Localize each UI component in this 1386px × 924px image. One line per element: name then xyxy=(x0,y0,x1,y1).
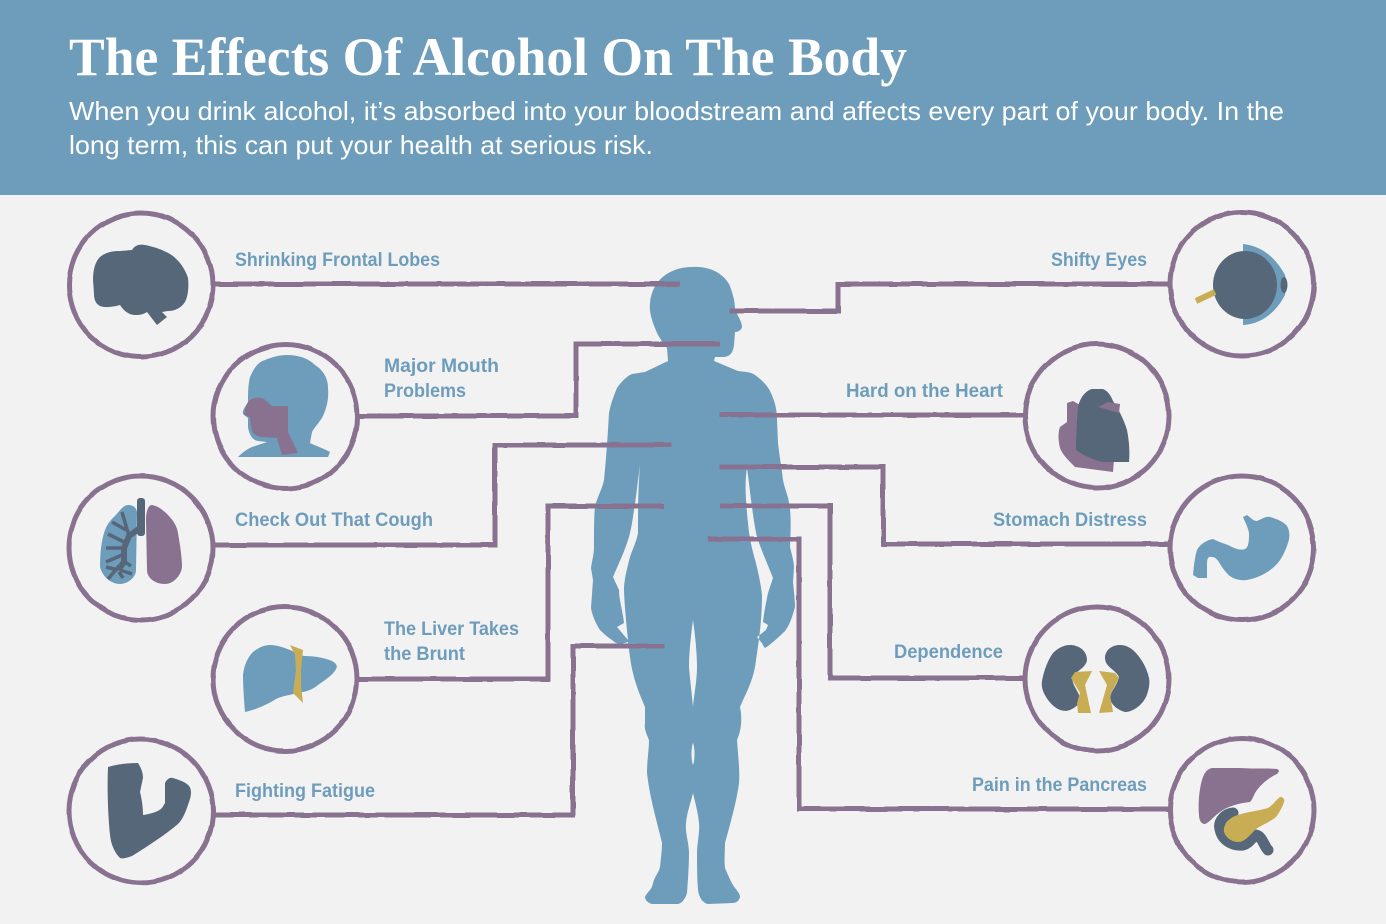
icon: pancreas xyxy=(1199,768,1284,850)
header banner xyxy=(0,0,1386,195)
label: Shifty Eyes: Shifty Eyes xyxy=(1051,250,1147,271)
icon: stomach xyxy=(1193,515,1289,580)
label: Check Out That Cough: Check Out That Cough xyxy=(235,510,433,531)
badge: stomach xyxy=(1170,476,1314,620)
connector: cough xyxy=(214,445,672,545)
icon: flexed arm xyxy=(108,763,191,858)
icon: brain xyxy=(93,245,188,325)
icon: kidneys xyxy=(1042,645,1149,713)
connector: fatigue xyxy=(214,646,664,815)
connector: heart xyxy=(720,412,1024,418)
connector: dependence xyxy=(720,506,1024,678)
badge: heart xyxy=(1025,344,1169,488)
label: The Liver Takes the Brunt: The Liver Takes xyxy=(384,619,519,640)
connector: stomach xyxy=(720,467,1168,544)
badge: liver xyxy=(213,607,357,751)
subtitle: long term, this can put your health at serious risk. xyxy=(69,130,653,160)
icon: head xyxy=(238,355,330,457)
label: Major Mouth Problems: Problems xyxy=(384,381,466,402)
label: Fighting Fatigue: Fighting Fatigue xyxy=(235,781,375,802)
title: The Effects Of Alcohol On The Body xyxy=(69,27,907,87)
badge: brain xyxy=(69,213,213,357)
label: Pain in the Pancreas: Pain in the Pancreas xyxy=(972,775,1147,796)
badge: pancreas xyxy=(1170,738,1314,882)
subtitle xyxy=(69,96,1284,160)
label: Shrinking Frontal Lobes: Shrinking Frontal Lobes xyxy=(235,250,440,271)
icon: lungs xyxy=(100,498,182,584)
connector: eyes xyxy=(730,284,1168,311)
badge: eye xyxy=(1170,212,1314,356)
badge: head and mouth xyxy=(214,344,358,488)
subtitle: When you drink alcohol, it’s absorbed into your bloodstream and affects every part of your body. In the xyxy=(69,96,1284,126)
label: Dependence: Dependence xyxy=(894,642,1003,663)
icon: heart xyxy=(1058,389,1129,472)
icon: liver xyxy=(243,645,337,712)
label: Major Mouth Problems: Major Mouth xyxy=(384,356,499,377)
label: The Liver Takes the Brunt: the Brunt xyxy=(384,644,466,665)
label: The Liver Takes the Brunt xyxy=(384,619,519,665)
label: Stomach Distress: Stomach Distress xyxy=(993,510,1147,531)
icon: eye xyxy=(1196,244,1288,325)
label: Major Mouth Problems xyxy=(384,356,499,402)
label: Hard on the Heart: Hard on the Heart xyxy=(846,381,1004,402)
connector: liver xyxy=(358,506,664,679)
connector: mouth xyxy=(358,344,720,416)
body silhouette xyxy=(591,267,795,904)
badge: kidneys xyxy=(1025,607,1169,751)
badge: arm xyxy=(69,739,213,883)
connector: brain xyxy=(214,282,680,286)
badge: lungs xyxy=(69,476,213,620)
connector: pancreas xyxy=(708,539,1168,809)
